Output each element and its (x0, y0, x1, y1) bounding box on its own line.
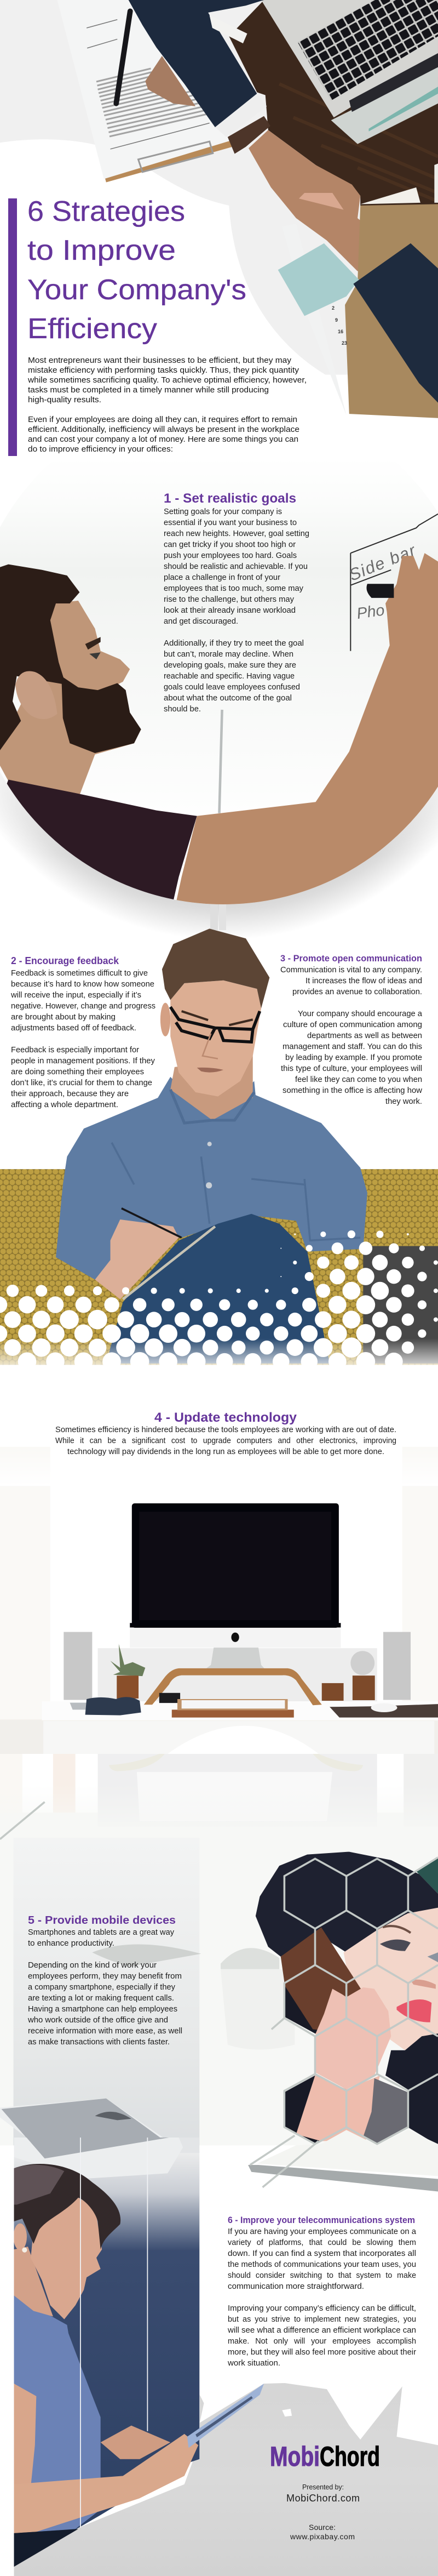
text: feedback: adjustments based off of feedback. (11, 1024, 136, 1033)
text: presented by: Presented by: (302, 2483, 344, 2491)
title: 6 Strategies (27, 196, 185, 227)
text: goals: about what the outcome of the goal (164, 694, 292, 703)
logo: MobiChord: Chord (320, 2441, 380, 2472)
text: intro: Most entrepreneurs want their businesses to be efficient, but they may (28, 356, 292, 365)
text: communication: provides an avenue to collaboration. (292, 988, 422, 996)
text: mobile devices: Depending on the kind of work your (28, 1961, 157, 1970)
text: source: www.pixabay.com (290, 2532, 355, 2541)
text: communication: Communication is vital to any company. (280, 966, 422, 974)
text: intro: and can cost your company a lot of money. Here are some things you can (28, 435, 298, 444)
text: intro: mistake efficiency with performing tasks quickly. Thus, they pick quantity (28, 366, 299, 375)
text: feedback: are doing something their employees (11, 1068, 144, 1076)
text: feedback: negative. However, change and progress (11, 1002, 155, 1011)
text: goals: Setting goals for your company is (164, 508, 282, 516)
panel: desk with computer (0, 1447, 438, 1756)
text: communication: feel like they can come to you when (295, 1075, 422, 1084)
text: intro: efficient. Additionally, inefficiency will always be present in the workplace (28, 425, 299, 434)
heading: 6: 6 - Improve your telecommunications system (228, 2215, 415, 2225)
text: telecommunications: If you are having your employees communicate on a (228, 2227, 417, 2236)
text: goals: Additionally, if they try to meet the goal (164, 639, 304, 648)
icon: calendar numbers on desk (332, 305, 347, 346)
text: mobile devices: who work outside of the office give and (27, 2016, 168, 2025)
text: goals: and get discouraged. (164, 617, 238, 626)
text: communication: they work. (385, 1097, 422, 1106)
text: mobile devices: are texting a lot or making frequent calls. (28, 1994, 174, 2003)
text: communication: this type of culture, your employees will (281, 1064, 422, 1073)
text: mobile devices: receive information with more ease, as well (28, 2027, 182, 2036)
text: presented by (286, 2483, 360, 2504)
title: to Improve (27, 235, 176, 266)
heading: 5: 5 - Provide mobile devices (28, 1914, 176, 1927)
panel: woman with tablet (13, 2138, 264, 2567)
text: technology: While it can be a significant cost to upgrade computers and other electronics, improving (55, 1437, 396, 1445)
text: goals: employees that is too much, some may (164, 584, 304, 593)
text: telecommunications: the methods of communications your team uses, you (228, 2260, 416, 2269)
text: telecommunications: Improving your company’s efficiency can be difficult, (228, 2304, 416, 2313)
text: goals: push your employees too hard. Goals (164, 551, 297, 560)
text: telecommunications: communication more straightforward. (228, 2282, 364, 2291)
text: goals: goals could leave employees confused (164, 683, 300, 692)
text: source (290, 2523, 355, 2541)
text: feedback: are brought about by making (11, 1013, 116, 1022)
text: telecommunications: but as you strive to implement new strategies, you (228, 2315, 416, 2324)
icon: calendar numbers on desk: 16 (338, 329, 343, 334)
text: mobile devices: Having a smartphone can help employees (28, 2005, 177, 2014)
text: goals: but can’t, morale may decline. When (164, 650, 293, 659)
text: communication: culture of open communication among (283, 1021, 422, 1029)
text: mobile devices: employees perform, they may benefit from (28, 1972, 182, 1981)
text: intro: Even if your employees are doing all they can, it requires effort to remain (28, 415, 297, 424)
panel: faded chair and desk background (0, 1754, 438, 2179)
text: communication: Your company should encourage a (298, 1010, 423, 1018)
text: mobile devices: Smartphones and tablets are a great way (28, 1928, 175, 1937)
panel: notebook and diagonal lines (248, 2130, 438, 2191)
text: mobile devices: a company smartphone, especially if they (28, 1983, 176, 1992)
text: feedback: people in management positions. If they (11, 1057, 155, 1065)
icon: calendar numbers on desk: 9 (335, 317, 338, 323)
heading: 4: 4 - Update technology (154, 1410, 297, 1425)
text: feedback: their approach, because they are (11, 1090, 129, 1098)
panel: circle photo of man at whiteboard: Side bar (347, 541, 419, 585)
title: Efficiency (27, 313, 157, 345)
panel: circle photo of man at whiteboard: Pho (356, 601, 385, 623)
panel: circle photo of man at whiteboard (0, 513, 438, 904)
text: telecommunications (227, 2227, 417, 2368)
text: goals: should be realistic and achievable. If you (164, 562, 308, 571)
text: goals: reach new heights. However, goal setting (164, 529, 309, 538)
icon: calendar numbers on desk: 2 (332, 305, 335, 311)
text: mobile devices: as make transactions with clients faster. (28, 2038, 170, 2047)
text: goals: developing goals, make sure they are (164, 661, 296, 670)
text: feedback: will receive the input, especially if it’s (10, 991, 141, 1000)
text: communication (280, 966, 423, 1106)
grainy ring below circle photo (0, 772, 438, 933)
text: telecommunications: more, but they will also feel more positive about their (228, 2348, 416, 2357)
text: intro: while sometimes sacrificing quality. To achieve optimal efficiency, however, (27, 376, 307, 385)
heading: 2: 2 - Encourage feedback (11, 955, 119, 966)
logo: MobiChord: Mobi (270, 2441, 320, 2472)
text: feedback: don’t like, it’s crucial for them to change (11, 1079, 152, 1087)
text: mobile devices: to enhance productivity. (28, 1939, 114, 1948)
text: technology: Sometimes efficiency is hindered because the tools employees are working with are out of date. (55, 1426, 396, 1434)
text: goals: look at their already insane workload (164, 606, 296, 615)
heading: 1: 1 - Set realistic goals (164, 491, 296, 506)
text: goals: can get tricky if you shoot too high or (164, 540, 296, 549)
text: telecommunications: down. If you can find a system that incorporates all (228, 2249, 416, 2258)
text: communication: something in the office is affecting how (283, 1086, 423, 1095)
text: telecommunications: work situation. (227, 2359, 280, 2368)
icon: halftone white dots (0, 1230, 438, 1392)
text: feedback (10, 969, 155, 1109)
text: feedback: Feedback is sometimes difficult to give (11, 969, 148, 978)
text: telecommunications: will see what a difference an efficient workplace can (227, 2326, 416, 2335)
accent bar (8, 198, 17, 456)
text: goals: reachable and specific. Having vague (164, 672, 295, 681)
text: feedback: affecting a whole department. (11, 1101, 118, 1109)
text: goals: should be. (164, 705, 201, 714)
text: intro: high-quality results. (28, 396, 101, 404)
logo: MobiChord (270, 2441, 380, 2472)
text: goals: essential if you want your business to (164, 518, 297, 527)
panel: woman on phone in hexagons (256, 1852, 438, 2145)
text: goals: place a challenge in front of your (164, 573, 280, 582)
text: intro (27, 356, 307, 454)
text: intro: tasks must be completed in a timely manner while still producing (28, 386, 269, 395)
text: telecommunications: make. Not only will your employees accomplish (228, 2337, 416, 2346)
text: telecommunications: should consider switching to that system to make (228, 2271, 416, 2280)
text: feedback: because it’s hard to know how someone (11, 980, 154, 989)
text: mobile devices (27, 1928, 182, 2047)
text: goals: rise to the challenge, but others may (164, 595, 295, 604)
title: Your Company's (27, 274, 246, 306)
text: presented by: MobiChord.com (286, 2493, 360, 2504)
hero photo: handshake over desk (0, 0, 438, 418)
panel: watercolor ink footer (14, 2383, 438, 2576)
heading: 3: 3 - Promote open communication (280, 953, 422, 964)
text: technology (55, 1426, 396, 1456)
icon: calendar numbers on desk: 23 (342, 340, 347, 346)
text: feedback: Feedback is especially important for (11, 1046, 139, 1055)
text: technology: technology will pay dividends in the long run as employees will be able to get more done. (67, 1447, 384, 1456)
panel: man with glasses on yellow sofa (0, 928, 438, 1365)
text: intro: do to improve efficiency in your offices: (28, 445, 173, 454)
text: goals (164, 508, 309, 714)
text: communication: departments as well as between (307, 1031, 422, 1040)
title (27, 196, 246, 345)
text: communication: management and staff. You can do this (283, 1042, 422, 1051)
text: communication: by leading by example. If you promote (285, 1053, 422, 1062)
text: source: Source: (309, 2523, 336, 2532)
text: communication: It increases the flow of ideas and (306, 977, 422, 985)
text: telecommunications: variety of platforms, that could be slowing them (228, 2238, 416, 2247)
